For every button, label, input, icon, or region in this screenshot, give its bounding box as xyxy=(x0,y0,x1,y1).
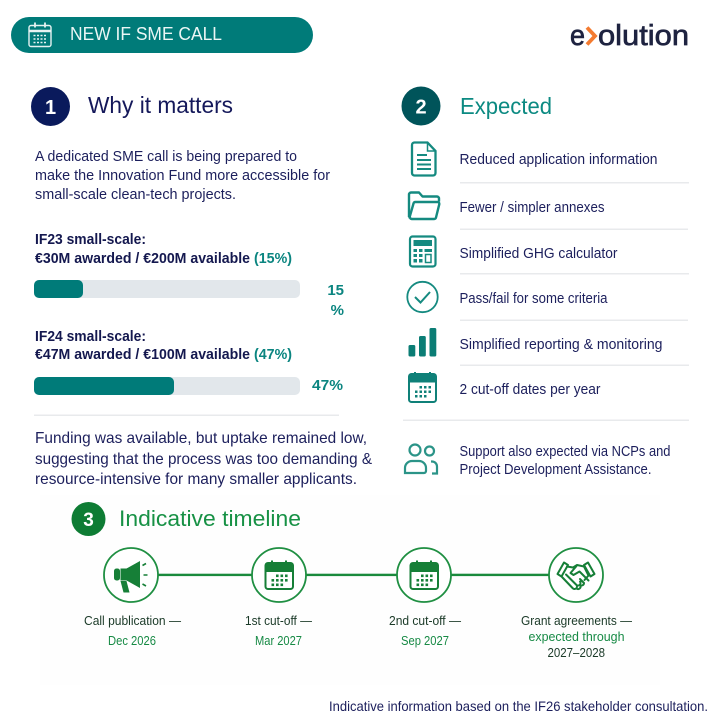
icon: document xyxy=(412,142,436,176)
timeline node: 1st cut-off xyxy=(252,548,306,602)
IF23 label: (15%) xyxy=(254,251,292,267)
icon: bars xyxy=(408,328,436,356)
label: call publication: Call publication — xyxy=(84,614,181,628)
icon: people xyxy=(405,444,437,474)
heading: indicative timeline: Indicative timeline xyxy=(119,506,301,531)
badge 2 xyxy=(402,86,440,126)
conclusion paragraph: resource-intensive for many smaller applicants. xyxy=(35,471,357,488)
intro paragraph: small-scale clean-tech projects. xyxy=(35,186,236,203)
intro paragraph: make the Innovation Fund more accessible for xyxy=(35,167,330,184)
conclusion paragraph: suggesting that the process was too demanding & xyxy=(35,451,372,468)
badge 3 xyxy=(72,502,106,536)
panel: expected xyxy=(402,86,689,478)
IF23 label: €30M awarded / €200M available xyxy=(35,251,250,267)
heading: why it matters: Why it matters xyxy=(88,92,233,118)
icon: calendar xyxy=(409,372,436,402)
item: reduced application information: Reduced application information xyxy=(460,152,658,168)
icon: megaphone xyxy=(114,561,148,592)
label: 2nd cut-off xyxy=(389,614,461,648)
icon: folder xyxy=(409,192,439,219)
IF23 label xyxy=(35,232,292,267)
label: grant agreements: expected through xyxy=(528,630,625,644)
item: cut-off dates: 2 cut-off dates per year xyxy=(460,382,601,398)
banner title: NEW IF SME CALL xyxy=(70,24,222,44)
IF23 value: 15 xyxy=(327,282,344,299)
conclusion paragraph: Funding was available, but uptake remained low, xyxy=(35,430,367,447)
IF23 progress bar xyxy=(34,280,300,298)
icon: handshake xyxy=(558,562,594,589)
intro paragraph xyxy=(35,148,330,203)
logo: evolution: olution xyxy=(598,20,689,52)
timeline node: call publication xyxy=(104,548,158,602)
label: grant agreements: 2027–2028 xyxy=(548,646,605,660)
timeline node: grant agreements xyxy=(549,548,603,602)
label: 1st cut-off: 1st cut-off — xyxy=(245,614,312,628)
IF24 label xyxy=(35,329,292,363)
IF24 label: €47M awarded / €100M available xyxy=(35,347,250,363)
timeline node: 2nd cut-off xyxy=(397,548,451,602)
item: fewer annexes: Fewer / simpler annexes xyxy=(460,200,604,216)
item: GHG calculator: Simplified GHG calculator xyxy=(460,246,618,262)
header banner xyxy=(11,17,313,53)
badge 3: 3 xyxy=(83,510,94,531)
item: reporting: Simplified reporting & monitoring xyxy=(460,337,662,353)
logo: evolution: e xyxy=(570,20,585,52)
IF23 label: IF23 small-scale: xyxy=(35,232,146,248)
IF23 value: % xyxy=(331,302,344,319)
IF24 progress bar xyxy=(34,377,300,395)
heading: expected: Expected xyxy=(460,93,552,119)
IF24 label: (47%) xyxy=(254,347,292,363)
icon: banner calendar xyxy=(29,22,51,46)
panel: why it matters xyxy=(31,87,372,488)
badge 2: 2 xyxy=(415,96,427,118)
item: pass/fail: Pass/fail for some criteria xyxy=(460,291,608,307)
icon: calendar xyxy=(410,560,438,589)
panel: indicative timeline xyxy=(72,502,632,660)
label: 1st cut-off: Mar 2027 xyxy=(255,634,302,648)
label: call publication xyxy=(84,614,181,648)
label: grant agreements xyxy=(521,614,632,660)
support text: Support also expected via NCPs and xyxy=(460,444,670,460)
conclusion paragraph xyxy=(35,430,372,488)
icon: check circle xyxy=(407,282,438,312)
label: 2nd cut-off: 2nd cut-off — xyxy=(389,614,461,628)
IF24 label: IF24 small-scale: xyxy=(35,329,146,345)
intro paragraph: A dedicated SME call is being prepared to xyxy=(35,148,297,165)
label: call publication: Dec 2026 xyxy=(108,634,156,648)
IF24 value: 47% xyxy=(312,377,343,394)
support text: Project Development Assistance. xyxy=(460,462,652,478)
icon: calculator xyxy=(410,236,436,266)
support text xyxy=(460,444,670,478)
label: 2nd cut-off: Sep 2027 xyxy=(401,634,449,648)
icon: calendar xyxy=(266,560,293,589)
badge 1 xyxy=(31,87,70,126)
label: grant agreements: Grant agreements — xyxy=(521,614,632,628)
label: 1st cut-off xyxy=(245,614,312,648)
badge 1: 1 xyxy=(45,97,56,119)
IF23 value xyxy=(327,282,344,319)
